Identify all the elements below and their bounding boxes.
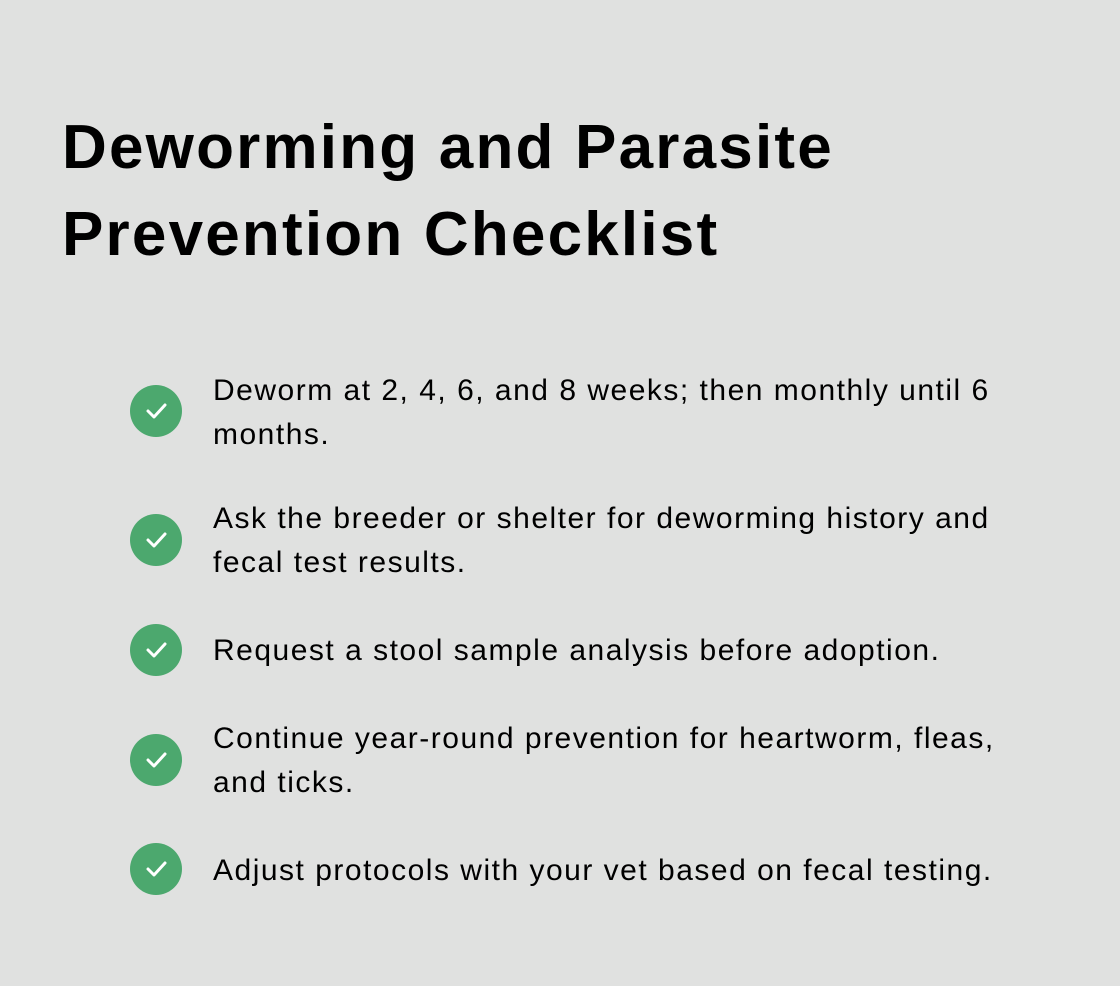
item 4 text: Continue year-round prevention for heartworm, fleas, bbox=[213, 722, 995, 755]
item 3 text: Request a stool sample analysis before adoption. bbox=[213, 634, 940, 667]
icon: check 4 bbox=[130, 734, 182, 786]
item 4 text: and ticks. bbox=[213, 766, 355, 799]
item 4 text bbox=[213, 722, 995, 799]
icon: check 3 bbox=[130, 624, 182, 676]
icon: check 1 bbox=[130, 385, 182, 437]
title bbox=[62, 113, 834, 269]
item 2 text: Ask the breeder or shelter for deworming history and bbox=[213, 502, 990, 535]
item 1 text: Deworm at 2, 4, 6, and 8 weeks; then monthly until 6 bbox=[213, 374, 990, 407]
title: Deworming and Parasite bbox=[62, 113, 834, 182]
title: Prevention Checklist bbox=[62, 200, 719, 269]
icon: check 5 bbox=[130, 843, 182, 895]
icon: check 2 bbox=[130, 514, 182, 566]
item 2 text bbox=[213, 502, 990, 579]
item 1 text bbox=[213, 374, 990, 451]
item 5 text: Adjust protocols with your vet based on fecal testing. bbox=[213, 854, 993, 887]
item 1 text: months. bbox=[213, 418, 330, 451]
item 2 text: fecal test results. bbox=[213, 546, 467, 579]
